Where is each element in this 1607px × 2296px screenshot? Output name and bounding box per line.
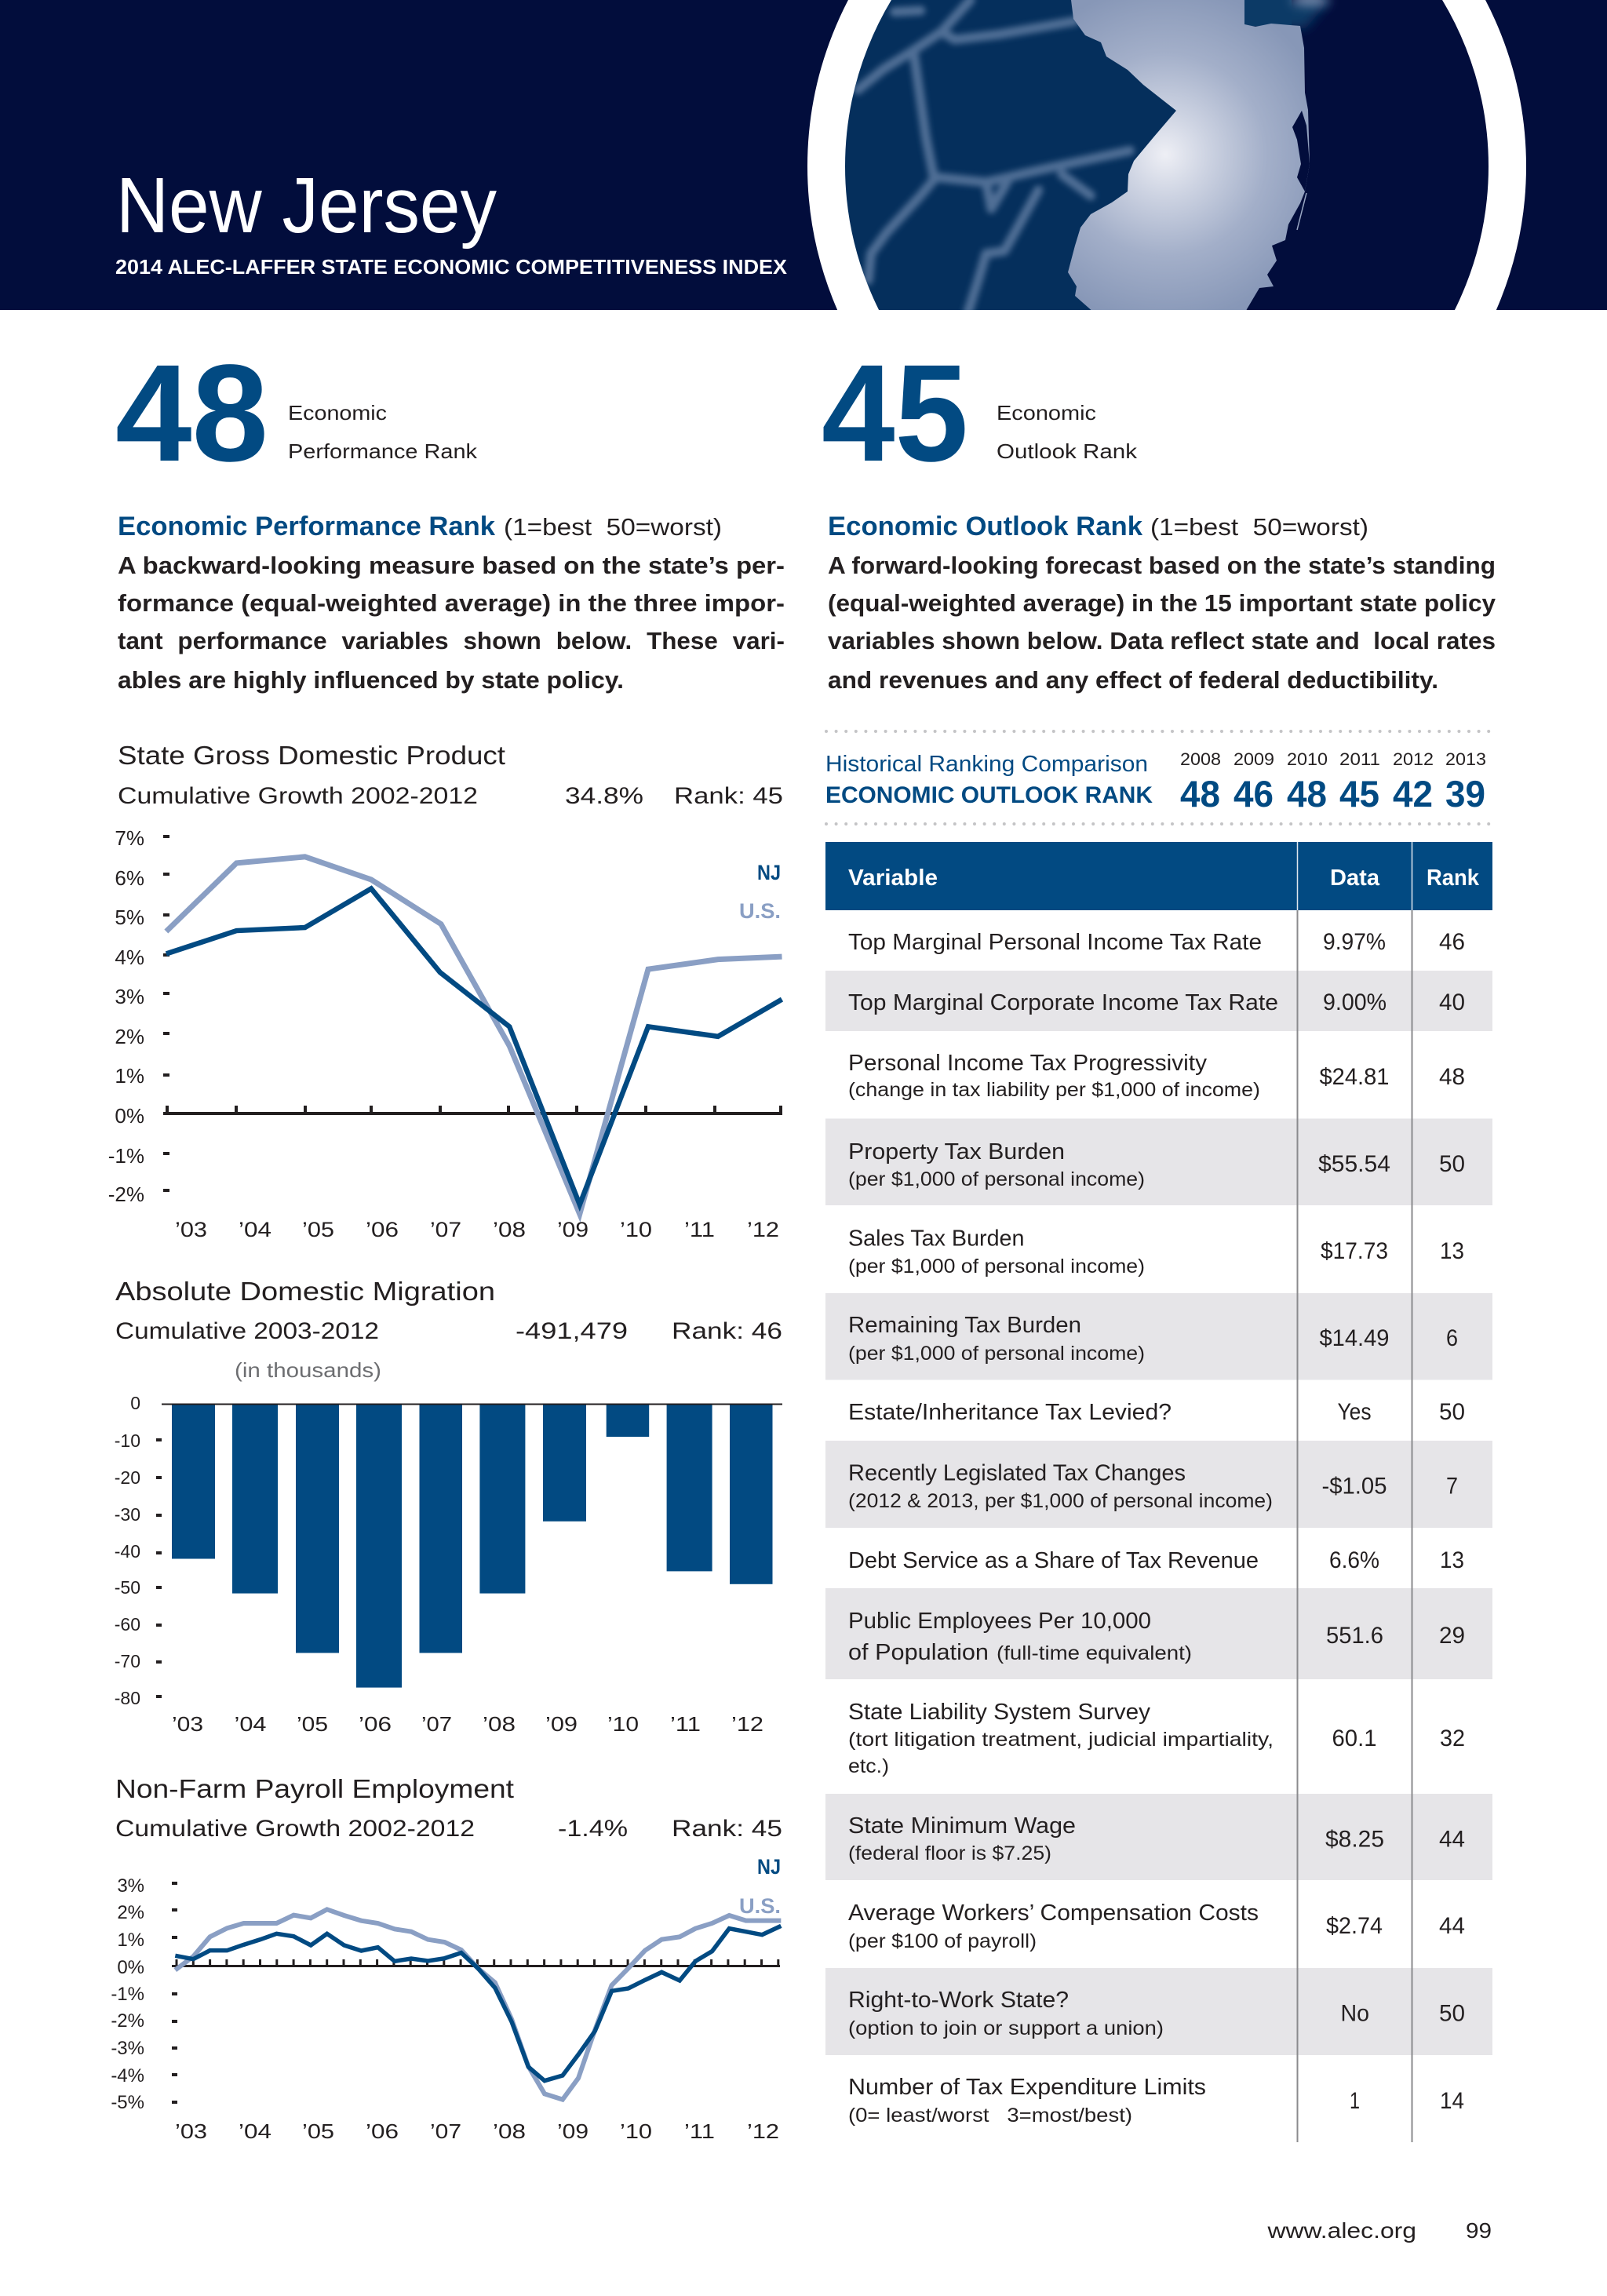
chart: non-farm payroll employment bbox=[111, 1774, 782, 2143]
chart: absolute domestic migration: ’10 bbox=[607, 1712, 639, 1736]
chart: absolute domestic migration: -20 bbox=[115, 1467, 140, 1488]
chart: non-farm payroll employment: 3% bbox=[117, 1875, 144, 1897]
chart: absolute domestic migration: -30 bbox=[115, 1504, 140, 1525]
chart: state gross domestic product bbox=[108, 741, 783, 1241]
chart: state gross domestic product: 6% bbox=[115, 866, 144, 890]
row: public employees bbox=[848, 1609, 1465, 1665]
page header banner bbox=[0, 0, 1607, 310]
row: top marginal personal income tax rate: 9.97% bbox=[1323, 929, 1386, 955]
table header: Rank bbox=[1427, 866, 1480, 891]
row: public employees: (full-time equivalent) bbox=[997, 1642, 1192, 1664]
historical ranking comparison bbox=[825, 731, 1493, 824]
outlook rank description: (1=best 50=worst) bbox=[1150, 513, 1368, 541]
chart: state gross domestic product: ’09 bbox=[557, 1218, 589, 1241]
chart: absolute domestic migration: -60 bbox=[115, 1614, 140, 1635]
chart: state gross domestic product: ’10 bbox=[620, 1218, 652, 1241]
chart: non-farm payroll employment: Cumulative Growth 2002-2012 bbox=[115, 1816, 475, 1842]
chart: non-farm payroll employment: ’07 bbox=[430, 2119, 461, 2143]
economic outlook rank callout bbox=[822, 337, 1138, 490]
chart: state gross domestic product: 2% bbox=[115, 1025, 144, 1048]
chart: non-farm payroll employment: ’03 bbox=[175, 2119, 207, 2143]
row: top marginal corporate income tax rate bbox=[848, 989, 1465, 1015]
row: top marginal corporate income tax rate: Top Marginal Corporate Income Tax Rate bbox=[848, 990, 1278, 1015]
outlook rank description: variables shown below. Data reflect state and local rates bbox=[828, 627, 1496, 654]
chart: non-farm payroll employment: Rank: 45 bbox=[672, 1816, 782, 1842]
row: debt service: 13 bbox=[1440, 1547, 1464, 1573]
historical ranking comparison: Historical Ranking Comparison bbox=[825, 752, 1148, 777]
row: property tax burden: 50 bbox=[1439, 1151, 1465, 1177]
chart: state gross domestic product: NJ bbox=[757, 861, 781, 884]
chart: state gross domestic product: ’04 bbox=[239, 1218, 271, 1241]
chart: state gross domestic product: 3% bbox=[115, 985, 144, 1008]
chart: state gross domestic product: ’08 bbox=[493, 1218, 526, 1241]
historical ranking comparison: 2008 bbox=[1180, 749, 1221, 769]
chart: state gross domestic product: -1% bbox=[108, 1144, 144, 1168]
chart: absolute domestic migration: ’05 bbox=[297, 1712, 328, 1736]
row: right-to-work state: (option to join or support a union) bbox=[848, 2017, 1164, 2039]
chart: absolute domestic migration: -491,479 bbox=[516, 1318, 628, 1344]
row: right-to-work state: No bbox=[1340, 2001, 1369, 2026]
row: debt service: Debt Service as a Share of Tax Revenue bbox=[848, 1548, 1259, 1573]
policy variables table bbox=[825, 842, 1492, 2142]
row: estate and inheritance tax: Yes bbox=[1337, 1399, 1372, 1425]
chart: state gross domestic product: Rank: 45 bbox=[674, 783, 783, 809]
chart: state gross domestic product: 0% bbox=[115, 1104, 144, 1128]
row: top marginal personal income tax rate: 46 bbox=[1439, 929, 1465, 955]
chart: absolute domestic migration: ’09 bbox=[545, 1712, 578, 1736]
chart: absolute domestic migration: 0 bbox=[130, 1393, 140, 1413]
chart: state gross domestic product: ’06 bbox=[366, 1218, 399, 1241]
historical ranking comparison: 42 bbox=[1393, 773, 1433, 815]
row: sales tax burden: 13 bbox=[1440, 1238, 1464, 1264]
chart: non-farm payroll employment: 1% bbox=[117, 1930, 144, 1951]
chart: absolute domestic migration: ’07 bbox=[421, 1712, 452, 1736]
chart: non-farm payroll employment: ’12 bbox=[747, 2119, 779, 2143]
row: top marginal personal income tax rate: Top Marginal Personal Income Tax Rate bbox=[848, 930, 1262, 955]
chart: absolute domestic migration: ’12 bbox=[731, 1712, 763, 1736]
outlook rank description: Economic Outlook Rank bbox=[828, 512, 1142, 541]
row: remaining tax burden: Remaining Tax Burden bbox=[848, 1313, 1081, 1338]
chart: absolute domestic migration: (in thousands) bbox=[235, 1358, 381, 1382]
chart: non-farm payroll employment: -2% bbox=[111, 2010, 144, 2032]
historical ranking comparison: 2011 bbox=[1339, 749, 1380, 769]
performance rank description: tant performance variables shown below. These vari- bbox=[118, 627, 785, 654]
row: debt service: 6.6% bbox=[1329, 1547, 1379, 1573]
historical ranking comparison: 39 bbox=[1445, 773, 1485, 815]
chart: non-farm payroll employment: ’10 bbox=[620, 2119, 652, 2143]
row: personal income tax progressivity: 48 bbox=[1439, 1064, 1465, 1090]
subtitle: 2014 ALEC-LAFFER STATE ECONOMIC COMPETITIVENESS INDEX bbox=[115, 255, 788, 279]
row: state minimum wage: $8.25 bbox=[1325, 1827, 1384, 1852]
chart: state gross domestic product: State Gross Domestic Product bbox=[118, 741, 505, 770]
economic performance rank callout: Economic bbox=[288, 401, 387, 425]
performance rank description bbox=[118, 512, 785, 694]
row: remaining tax burden: (per $1,000 of personal income) bbox=[848, 1343, 1145, 1365]
row: property tax burden: Property Tax Burden bbox=[848, 1139, 1065, 1164]
row: state liability system survey: etc.) bbox=[848, 1755, 889, 1777]
performance rank description: Economic Performance Rank bbox=[118, 512, 495, 541]
chart: non-farm payroll employment: ’05 bbox=[302, 2119, 334, 2143]
economic outlook rank callout: Outlook Rank bbox=[997, 439, 1138, 463]
row: state liability system survey: (tort litigation treatment, judicial impartiality, bbox=[848, 1729, 1274, 1751]
row: estate and inheritance tax bbox=[848, 1399, 1465, 1425]
chart: state gross domestic product: ’05 bbox=[302, 1218, 334, 1241]
chart: absolute domestic migration: ’08 bbox=[483, 1712, 516, 1736]
chart: state gross domestic product: U.S. bbox=[739, 899, 781, 923]
chart: non-farm payroll employment: -3% bbox=[111, 2038, 144, 2059]
economic performance rank callout: Performance Rank bbox=[288, 439, 478, 463]
table header: Data bbox=[1330, 866, 1380, 891]
chart: state gross domestic product: ’11 bbox=[684, 1218, 715, 1241]
outlook rank description: (equal-weighted average) in the 15 important state policy bbox=[828, 589, 1496, 617]
chart: absolute domestic migration: ’11 bbox=[670, 1712, 701, 1736]
outlook rank description bbox=[828, 512, 1496, 694]
footer bbox=[1266, 2218, 1492, 2243]
chart: state gross domestic product: -2% bbox=[108, 1183, 144, 1206]
row: recently legislated tax changes: -$1.05 bbox=[1321, 1474, 1387, 1499]
row: sales tax burden: Sales Tax Burden bbox=[848, 1226, 1025, 1251]
row: right-to-work state: Right-to-Work State? bbox=[848, 1988, 1069, 2013]
row: average workers compensation costs bbox=[848, 1901, 1465, 1952]
row: estate and inheritance tax: 50 bbox=[1439, 1399, 1465, 1425]
chart: non-farm payroll employment: ’09 bbox=[557, 2119, 589, 2143]
chart: state gross domestic product: 7% bbox=[115, 826, 144, 850]
row: debt service bbox=[848, 1547, 1464, 1573]
chart: absolute domestic migration: -10 bbox=[115, 1430, 140, 1451]
row: state liability system survey: State Liability System Survey bbox=[848, 1700, 1151, 1725]
historical ranking comparison: 2010 bbox=[1287, 749, 1328, 769]
outlook rank description: and revenues and any effect of federal deductibility. bbox=[828, 666, 1438, 694]
chart: absolute domestic migration: -40 bbox=[115, 1541, 140, 1562]
chart: non-farm payroll employment: ’11 bbox=[684, 2119, 715, 2143]
row: property tax burden: (per $1,000 of personal income) bbox=[848, 1168, 1145, 1190]
chart: non-farm payroll employment: Non-Farm Payroll Employment bbox=[115, 1774, 514, 1803]
performance rank description: formance (equal-weighted average) in the three impor- bbox=[118, 589, 785, 617]
row: state liability system survey bbox=[848, 1700, 1465, 1777]
state map in white ring bbox=[807, 0, 1526, 310]
chart: absolute domestic migration: -80 bbox=[115, 1688, 140, 1708]
chart: absolute domestic migration: ’04 bbox=[234, 1712, 267, 1736]
historical ranking comparison: 45 bbox=[1339, 773, 1379, 815]
chart: absolute domestic migration bbox=[115, 1277, 782, 1736]
chart: absolute domestic migration: -50 bbox=[115, 1577, 140, 1598]
outlook rank description: A forward-looking forecast based on the state’s standing bbox=[828, 552, 1496, 579]
chart: state gross domestic product: 5% bbox=[115, 906, 144, 929]
row: remaining tax burden: 6 bbox=[1446, 1325, 1458, 1351]
row: recently legislated tax changes: Recently Legislated Tax Changes bbox=[848, 1461, 1186, 1486]
chart: state gross domestic product: ’07 bbox=[430, 1218, 461, 1241]
table header bbox=[825, 842, 1492, 910]
chart: non-farm payroll employment: 0% bbox=[117, 1957, 144, 1978]
row: sales tax burden: (per $1,000 of personal income) bbox=[848, 1256, 1145, 1277]
performance rank description: (1=best 50=worst) bbox=[504, 513, 722, 541]
row: number of tax expenditure limits: Number of Tax Expenditure Limits bbox=[848, 2075, 1206, 2100]
row: number of tax expenditure limits: (0= least/worst 3=most/best) bbox=[848, 2105, 1132, 2127]
row: personal income tax progressivity: (change in tax liability per $1,000 of income) bbox=[848, 1079, 1260, 1101]
chart: state gross domestic product: 1% bbox=[115, 1064, 144, 1088]
chart: non-farm payroll employment: ’04 bbox=[239, 2119, 271, 2143]
chart: state gross domestic product: 4% bbox=[115, 946, 144, 969]
chart: non-farm payroll employment: 2% bbox=[117, 1902, 144, 1923]
chart: state gross domestic product: ’12 bbox=[747, 1218, 779, 1241]
row: average workers compensation costs: (per $100 of payroll) bbox=[848, 1930, 1037, 1952]
row: public employees: 29 bbox=[1439, 1623, 1465, 1649]
row: average workers compensation costs: 44 bbox=[1439, 1913, 1465, 1939]
chart: state gross domestic product: 34.8% bbox=[565, 783, 643, 809]
chart: non-farm payroll employment: -1.4% bbox=[558, 1816, 628, 1842]
row: recently legislated tax changes: (2012 & 2013, per $1,000 of personal income) bbox=[848, 1490, 1273, 1512]
chart: absolute domestic migration: ’06 bbox=[359, 1712, 392, 1736]
title: New Jersey bbox=[116, 162, 497, 250]
row: top marginal corporate income tax rate: 9.00% bbox=[1323, 989, 1387, 1015]
chart: absolute domestic migration: Absolute Domestic Migration bbox=[115, 1277, 495, 1306]
chart: absolute domestic migration: ’03 bbox=[172, 1712, 203, 1736]
chart: non-farm payroll employment: U.S. bbox=[739, 1894, 781, 1918]
historical ranking comparison: 46 bbox=[1233, 773, 1274, 815]
historical ranking comparison: 2009 bbox=[1233, 749, 1274, 769]
row: top marginal personal income tax rate bbox=[848, 929, 1465, 955]
historical ranking comparison: ECONOMIC OUTLOOK RANK bbox=[825, 782, 1153, 808]
row: public employees: 551.6 bbox=[1326, 1623, 1383, 1649]
chart: non-farm payroll employment: NJ bbox=[757, 1855, 781, 1879]
row: remaining tax burden bbox=[848, 1313, 1458, 1365]
historical ranking comparison: 2012 bbox=[1393, 749, 1434, 769]
row: property tax burden bbox=[848, 1139, 1465, 1190]
table header: Variable bbox=[848, 866, 938, 891]
economic performance rank callout bbox=[115, 337, 478, 490]
row: average workers compensation costs: Average Workers’ Compensation Costs bbox=[848, 1901, 1259, 1926]
row: property tax burden: $55.54 bbox=[1318, 1151, 1390, 1177]
row: recently legislated tax changes bbox=[848, 1461, 1458, 1512]
row: state minimum wage: State Minimum Wage bbox=[848, 1813, 1076, 1839]
row: sales tax burden bbox=[848, 1226, 1464, 1277]
economic performance rank callout: 48 bbox=[115, 337, 268, 490]
footer: 99 bbox=[1466, 2218, 1492, 2243]
row: recently legislated tax changes: 7 bbox=[1446, 1474, 1458, 1499]
row: average workers compensation costs: $2.74 bbox=[1326, 1913, 1383, 1939]
row: right-to-work state: 50 bbox=[1439, 2001, 1465, 2026]
row: state minimum wage bbox=[848, 1813, 1465, 1864]
row: personal income tax progressivity bbox=[848, 1051, 1465, 1101]
row: sales tax burden: $17.73 bbox=[1321, 1238, 1388, 1264]
chart: state gross domestic product: Cumulative Growth 2002-2012 bbox=[118, 783, 478, 809]
chart: non-farm payroll employment: -5% bbox=[111, 2092, 144, 2113]
row: top marginal corporate income tax rate: 40 bbox=[1439, 989, 1465, 1015]
row: public employees: of Population bbox=[848, 1640, 989, 1665]
chart: non-farm payroll employment: -4% bbox=[111, 2065, 144, 2086]
row: personal income tax progressivity: $24.81 bbox=[1320, 1064, 1389, 1090]
economic outlook rank callout: 45 bbox=[822, 337, 968, 490]
chart: absolute domestic migration: Cumulative 2003-2012 bbox=[115, 1318, 379, 1344]
row: number of tax expenditure limits: 1 bbox=[1350, 2088, 1360, 2114]
row: state minimum wage: 44 bbox=[1439, 1827, 1465, 1852]
row: estate and inheritance tax: Estate/Inheritance Tax Levied? bbox=[848, 1400, 1172, 1425]
row: right-to-work state bbox=[848, 1988, 1465, 2039]
chart: state gross domestic product: ’03 bbox=[175, 1218, 207, 1241]
economic outlook rank callout: Economic bbox=[997, 401, 1096, 425]
row: state minimum wage: (federal floor is $7.25) bbox=[848, 1842, 1051, 1864]
row: number of tax expenditure limits bbox=[848, 2075, 1464, 2127]
performance rank description: ables are highly influenced by state policy. bbox=[118, 666, 624, 694]
row: public employees: Public Employees Per 10,000 bbox=[848, 1609, 1151, 1634]
row: state liability system survey: 32 bbox=[1440, 1726, 1465, 1751]
performance rank description: A backward-looking measure based on the state’s per- bbox=[118, 552, 785, 579]
chart: absolute domestic migration: -70 bbox=[115, 1651, 140, 1671]
row: state liability system survey: 60.1 bbox=[1332, 1726, 1376, 1751]
historical ranking comparison: 48 bbox=[1287, 773, 1327, 815]
historical ranking comparison: 48 bbox=[1180, 773, 1220, 815]
row: remaining tax burden: $14.49 bbox=[1320, 1325, 1389, 1351]
historical ranking comparison: 2013 bbox=[1445, 749, 1486, 769]
chart: non-farm payroll employment: -1% bbox=[111, 1984, 144, 2005]
row: personal income tax progressivity: Personal Income Tax Progressivity bbox=[848, 1051, 1208, 1076]
chart: non-farm payroll employment: ’08 bbox=[493, 2119, 526, 2143]
chart: non-farm payroll employment: ’06 bbox=[366, 2119, 399, 2143]
chart: absolute domestic migration: Rank: 46 bbox=[672, 1318, 782, 1344]
row: number of tax expenditure limits: 14 bbox=[1440, 2088, 1464, 2114]
footer: www.alec.org bbox=[1266, 2218, 1416, 2243]
